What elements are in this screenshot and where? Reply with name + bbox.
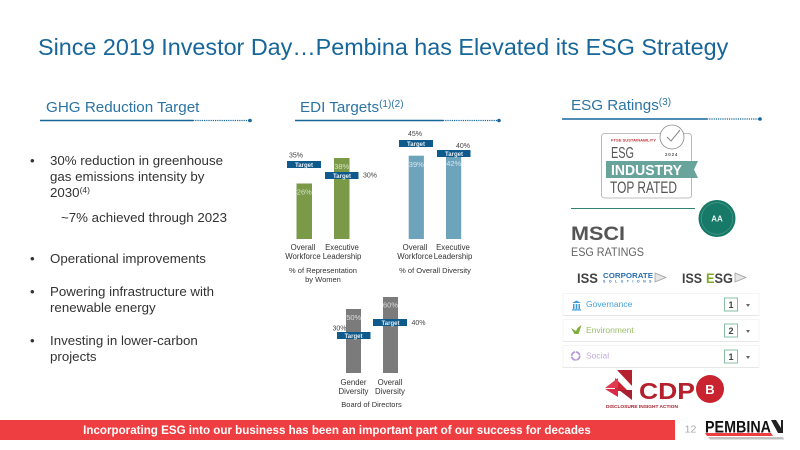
chart: board of directors: Diversity <box>339 387 369 396</box>
chart: representation by women: 30% <box>363 172 377 180</box>
scorecard: environment: Environment <box>586 325 634 335</box>
chart: board of directors: Target <box>345 334 362 340</box>
scorecard: social <box>563 346 759 368</box>
badge: ESG industry top rated: ESG <box>611 145 634 162</box>
chart: board of directors: Gender <box>340 378 367 387</box>
bullet list: • <box>30 251 35 266</box>
heading: ESG: ESG Ratings <box>571 97 659 114</box>
chart: representation by women: 35% <box>289 152 303 160</box>
logo: CDP score B: B <box>705 382 715 397</box>
chart: board of directors: 50% <box>346 313 362 322</box>
chart: overall diversity: Overall <box>403 243 428 252</box>
bullet list: • <box>30 333 35 348</box>
badge: ESG industry top rated: FTSE SUSTAINABILITY <box>611 138 657 142</box>
chart: overall diversity: Workforce <box>397 252 433 261</box>
chart: representation by women: Overall <box>291 243 316 252</box>
footer banner <box>0 420 675 440</box>
chart: representation by women: Target <box>295 163 313 169</box>
chart: representation by women: Executive <box>325 243 359 252</box>
chart: board of directors <box>332 297 426 409</box>
chart: board of directors: Board of Directors <box>341 400 402 409</box>
scorecard: environment: 2 <box>728 326 734 336</box>
chart: overall diversity: Leadership <box>434 252 473 261</box>
chart: overall diversity <box>397 131 473 275</box>
badge: ESG industry top rated <box>602 125 698 198</box>
logo: ISS ESG: ESG <box>706 270 733 286</box>
chart: overall diversity: 40% <box>456 143 470 150</box>
chart: overall diversity: Target <box>407 142 425 148</box>
logo: CDP score B: CDP <box>639 378 695 404</box>
bullet list: Powering infrastructure with <box>50 284 214 299</box>
scorecard: governance: Governance <box>586 299 633 309</box>
logo: CDP score B: DISCLOSURE INSIGHT ACTION <box>606 404 678 409</box>
logo: ISS ESG <box>682 270 746 286</box>
heading: GHG: GHG Reduction Target <box>46 99 200 116</box>
chart: board of directors: 60% <box>383 300 398 310</box>
badge: MSCI ESG ratings: MSCI <box>571 223 625 245</box>
chart: representation by women: by Women <box>305 275 341 284</box>
chart: representation by women: % of Representation <box>289 266 357 275</box>
chart: board of directors: Diversity <box>375 387 405 396</box>
chart: overall diversity: 42% <box>446 159 462 168</box>
badge: ESG industry top rated: INDUSTRY <box>611 162 682 179</box>
logo: ISS ESG: ISS <box>682 270 702 286</box>
bullet list: Operational improvements <box>50 251 206 266</box>
scorecard: governance <box>563 294 759 316</box>
chart: board of directors: Overall <box>378 378 403 387</box>
scorecard: social: Social <box>586 350 609 360</box>
bullet list: 2030 <box>50 185 80 200</box>
page number: 12 <box>685 424 696 436</box>
heading: ESG: (3) <box>659 97 671 108</box>
chart: overall diversity: Target <box>445 152 463 158</box>
badge: MSCI ESG ratings: AA <box>711 214 723 224</box>
bullet list <box>30 153 227 364</box>
title: Since 2019 Investor Day…Pembina has Elevated its ESG Strategy <box>38 34 729 60</box>
logo: ISS corporate solutions <box>577 270 666 286</box>
chart: overall diversity: Executive <box>436 243 470 252</box>
footer banner: Incorporating ESG into our business has been an important part of our success for decades <box>83 424 591 437</box>
badge: MSCI ESG ratings: ESG RATINGS <box>571 245 644 259</box>
bullet list: gas emissions intensity by <box>50 169 205 184</box>
logo: Pembina: PEMBINA <box>705 418 771 436</box>
chart: representation by women: 38% <box>334 162 350 171</box>
logo: ISS corporate solutions: ISS <box>577 270 598 286</box>
chart: representation by women: Target <box>333 174 351 180</box>
chart: overall diversity: 45% <box>408 131 422 138</box>
bullet list: Investing in lower-carbon <box>50 333 198 348</box>
badge: MSCI ESG ratings <box>571 200 736 259</box>
heading: EDI: (1)(2) <box>379 99 404 110</box>
chart: overall diversity: % of Overall Diversity <box>399 266 471 275</box>
scorecard: environment <box>563 320 759 342</box>
chart: representation by women: Workforce <box>285 252 321 261</box>
chart: board of directors: 30% <box>332 326 347 332</box>
bullet list: • <box>30 153 35 168</box>
bullet list: 30% reduction in greenhouse <box>50 153 223 168</box>
badge: ESG industry top rated: TOP RATED <box>610 179 677 197</box>
heading: EDI: EDI Targets <box>300 99 379 116</box>
logo: CDP score B <box>605 370 724 409</box>
scorecard: social: 1 <box>728 352 734 362</box>
logo: ISS corporate solutions: CORPORATE <box>603 271 653 280</box>
chart: overall diversity: 39% <box>409 160 424 169</box>
panel: GHG reduction target <box>30 99 252 364</box>
panel: ESG ratings <box>562 97 762 409</box>
bullet list: • <box>30 284 35 299</box>
chart: board of directors: Target <box>382 321 399 327</box>
logo: ISS corporate solutions: SOLUTIONS <box>603 280 653 284</box>
chart: representation by women <box>285 152 377 284</box>
panel: EDI targets <box>285 99 501 409</box>
chart: representation by women: Leadership <box>323 252 362 261</box>
chart: board of directors: 40% <box>411 320 426 327</box>
bullet list: renewable energy <box>50 300 156 315</box>
bullet list: projects <box>50 349 97 364</box>
scorecard: governance: 1 <box>728 300 734 310</box>
bullet list: ~7% achieved through 2023 <box>61 210 227 225</box>
bullet list: (4) <box>80 185 90 195</box>
chart: representation by women: 26% <box>297 188 312 196</box>
badge: ESG industry top rated: 2024 <box>665 152 678 157</box>
